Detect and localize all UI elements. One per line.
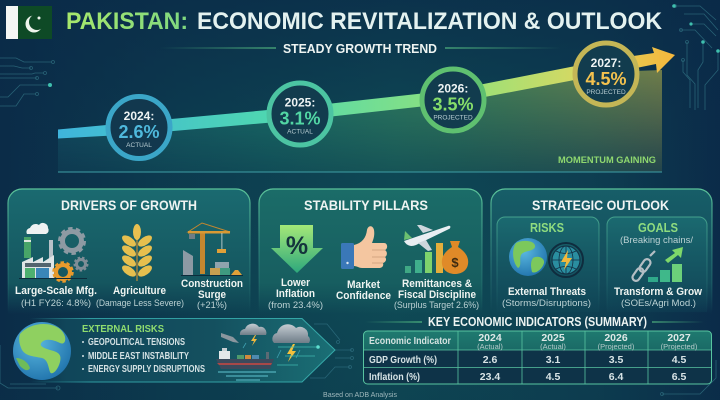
momentum caption: MOMENTUM GAINING bbox=[558, 155, 656, 166]
icon: wheat bbox=[120, 224, 154, 281]
sub-panel: risks bbox=[497, 217, 599, 312]
label: large-scale manufacturing: Large-Scale Mfg. bbox=[15, 285, 97, 297]
label: construction surge: Surge bbox=[198, 289, 226, 301]
label: remittances and fiscal discipline: (Surplus Target 2.6%) bbox=[394, 300, 479, 311]
icon: down arrow with percent: % bbox=[286, 232, 308, 260]
data point 2027: 4.5% bbox=[586, 69, 626, 89]
panel: drivers of growth bbox=[8, 189, 250, 314]
label: remittances and fiscal discipline bbox=[394, 278, 479, 311]
data point 2026 bbox=[422, 69, 484, 131]
label: agriculture: (Damage Less Severe) bbox=[96, 298, 184, 309]
label: lower inflation: Inflation bbox=[276, 288, 315, 300]
label: external threats: External Threats bbox=[508, 286, 586, 298]
icon: thumbs up bbox=[341, 226, 387, 269]
label: market confidence: Confidence bbox=[336, 290, 391, 302]
label: transform and grow: (SOEs/Agri Mod.) bbox=[621, 298, 696, 309]
label: large-scale manufacturing: (H1 FY26: 4.8%) bbox=[21, 298, 91, 309]
icon: broken chain and growth bbox=[631, 247, 683, 282]
icon: construction crane bbox=[181, 223, 243, 276]
table row: inflation: Inflation (%) bbox=[369, 371, 420, 383]
sub-panel: goals: (Breaking chains/ bbox=[620, 235, 693, 246]
table row: GDP growth: 3.5 bbox=[609, 354, 623, 366]
table header row: 2025 bbox=[541, 332, 565, 344]
sub-panel: goals bbox=[607, 217, 707, 312]
label: agriculture bbox=[96, 285, 184, 309]
icon: plane, bars and money bag: $ bbox=[451, 255, 459, 270]
label: lower inflation: (from 23.4%) bbox=[268, 300, 323, 311]
icon: globe bbox=[13, 322, 71, 380]
table row: inflation: 4.5 bbox=[546, 371, 560, 383]
sub-panel: risks: RISKS bbox=[530, 221, 564, 235]
table header row: (Projected) bbox=[661, 342, 698, 351]
banner: external risks bbox=[13, 318, 335, 382]
data point 2025: ACTUAL bbox=[287, 128, 313, 136]
label: transform and grow: Transform & Grow bbox=[614, 286, 702, 298]
label: large-scale manufacturing bbox=[15, 285, 97, 309]
chart area fill bbox=[58, 70, 662, 172]
label: external threats: (Storms/Disruptions) bbox=[502, 298, 591, 309]
table header row: (Projected) bbox=[598, 342, 635, 351]
panel: stability pillars bbox=[259, 189, 482, 314]
icon: down arrow with percent bbox=[271, 225, 323, 273]
data point 2026: 2026: bbox=[438, 82, 468, 96]
table row: inflation: 23.4 bbox=[480, 371, 500, 383]
data point 2024 bbox=[108, 96, 170, 158]
data point 2026: 3.5% bbox=[432, 94, 474, 114]
table row: GDP growth: GDP Growth (%) bbox=[369, 354, 437, 366]
heading: DRIVERS OF GROWTH bbox=[61, 197, 197, 213]
label: remittances and fiscal discipline: Fiscal Discipline bbox=[398, 289, 476, 301]
table row: GDP growth: 2.6 bbox=[483, 354, 497, 366]
label: market confidence: Market bbox=[347, 279, 380, 291]
table row: inflation: 6.5 bbox=[672, 371, 686, 383]
label: market confidence bbox=[336, 279, 391, 302]
label: construction surge: Construction bbox=[181, 278, 243, 290]
label: external threats bbox=[502, 286, 591, 309]
chart baseline bbox=[58, 172, 662, 173]
table header row: (Actual) bbox=[540, 342, 566, 351]
table row: GDP growth bbox=[369, 354, 686, 366]
table header row bbox=[369, 332, 698, 351]
data point 2027: 2027: bbox=[591, 56, 621, 70]
subtitle: steady growth trend: STEADY GROWTH TREND bbox=[283, 41, 437, 56]
list of external risks: GEOPOLITICAL TENSIONS bbox=[88, 337, 185, 348]
data point 2025 bbox=[269, 83, 331, 145]
data point 2027: PROJECTED bbox=[586, 89, 626, 96]
sub-panel: goals: GOALS bbox=[638, 221, 678, 235]
icon: factory and gears bbox=[19, 223, 88, 282]
heading: STABILITY PILLARS bbox=[304, 197, 428, 213]
data point 2024: 2.6% bbox=[118, 122, 160, 142]
label: construction surge bbox=[181, 278, 243, 311]
table header row: Economic Indicator bbox=[369, 335, 451, 347]
heading: STRATEGIC OUTLOOK bbox=[532, 197, 669, 213]
table header row: 2026 bbox=[604, 332, 628, 344]
icon: plane, bars and money bag bbox=[404, 225, 468, 274]
table: key economic indicators bbox=[364, 331, 712, 384]
list of external risks: MIDDLE EAST INSTABILITY bbox=[88, 351, 189, 362]
list of external risks bbox=[82, 337, 205, 375]
label: agriculture: Agriculture bbox=[113, 285, 166, 297]
label: lower inflation bbox=[268, 277, 323, 311]
table header row: 2024 bbox=[478, 332, 502, 344]
title: PAKISTAN: bbox=[66, 8, 188, 35]
title: ECONOMIC REVITALIZATION & OUTLOOK bbox=[197, 8, 663, 35]
data point 2027 bbox=[575, 43, 637, 105]
panel: strategic outlook bbox=[491, 189, 712, 314]
label: construction surge: (+21%) bbox=[197, 300, 227, 311]
chart: growth trend line 2024 to 2027 bbox=[58, 43, 675, 172]
list of external risks: ENERGY SUPPLY DISRUPTIONS bbox=[88, 364, 205, 375]
flag of Pakistan bbox=[6, 6, 52, 39]
data point 2025: 2025: bbox=[285, 96, 315, 110]
source note: Based on ADB Analysis bbox=[323, 390, 397, 399]
label: remittances and fiscal discipline: Remittances & bbox=[402, 278, 472, 290]
table header row: (Actual) bbox=[477, 342, 503, 351]
icon: cargo ship and storm clouds bbox=[216, 324, 320, 380]
table header row: 2027 bbox=[667, 332, 691, 344]
data point 2024: ACTUAL bbox=[126, 142, 152, 149]
table row: GDP growth: 3.1 bbox=[546, 354, 560, 366]
data point 2024: 2024: bbox=[124, 109, 154, 123]
table row: GDP growth: 4.5 bbox=[672, 354, 686, 366]
trend arrow bbox=[58, 47, 675, 138]
label: transform and grow bbox=[614, 286, 702, 309]
heading: EXTERNAL RISKS bbox=[82, 323, 164, 335]
table row: inflation: 6.4 bbox=[609, 371, 623, 383]
data point 2026: PROJECTED bbox=[433, 114, 473, 122]
data point 2025: 3.1% bbox=[280, 108, 320, 128]
table heading: key economic indicators: KEY ECONOMIC INDICATORS (SUMMARY) bbox=[428, 314, 647, 329]
icon: earth and threat globe bbox=[509, 238, 583, 277]
label: lower inflation: Lower bbox=[281, 277, 311, 289]
table row: inflation bbox=[369, 371, 686, 383]
